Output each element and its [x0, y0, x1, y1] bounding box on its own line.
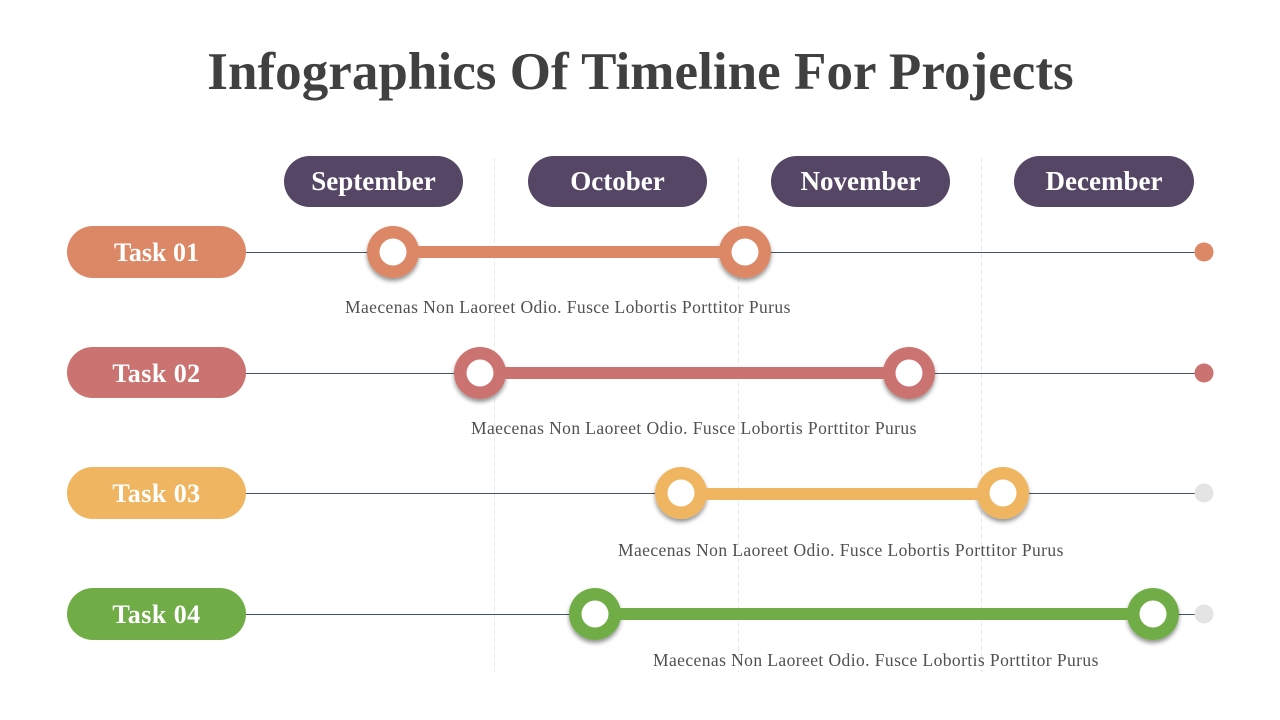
month header: October: October — [570, 166, 665, 196]
task label 01 — [67, 226, 246, 278]
task 01 track — [246, 226, 1214, 278]
caption task 02: Maecenas Non Laoreet Odio. Fusce Lobortis Porttitor Purus — [471, 418, 917, 438]
task label 03: Task 03 — [112, 479, 201, 508]
month header: December: December — [1046, 166, 1162, 196]
month header: December — [1014, 156, 1194, 207]
month header: November: November — [801, 166, 920, 196]
task 03 track — [246, 467, 1214, 519]
month header: October — [528, 156, 707, 207]
task label 03 — [67, 467, 246, 519]
task label 02: Task 02 — [112, 359, 201, 388]
title: Infographics Of Timeline For Projects — [207, 43, 1074, 101]
task label 04: Task 04 — [112, 600, 201, 629]
task label 04 — [67, 588, 246, 640]
caption task 03: Maecenas Non Laoreet Odio. Fusce Lobortis Porttitor Purus — [618, 540, 1064, 560]
task 04 track — [246, 588, 1214, 640]
task label 01: Task 01 — [114, 238, 199, 267]
month header: September — [284, 156, 463, 207]
caption task 04: Maecenas Non Laoreet Odio. Fusce Lobortis Porttitor Purus — [653, 650, 1099, 670]
month header: November — [771, 156, 950, 207]
caption task 01: Maecenas Non Laoreet Odio. Fusce Lobortis Porttitor Purus — [345, 297, 791, 317]
month header: September: September — [311, 166, 436, 196]
task label 02 — [67, 347, 246, 398]
task 02 track — [246, 347, 1214, 399]
